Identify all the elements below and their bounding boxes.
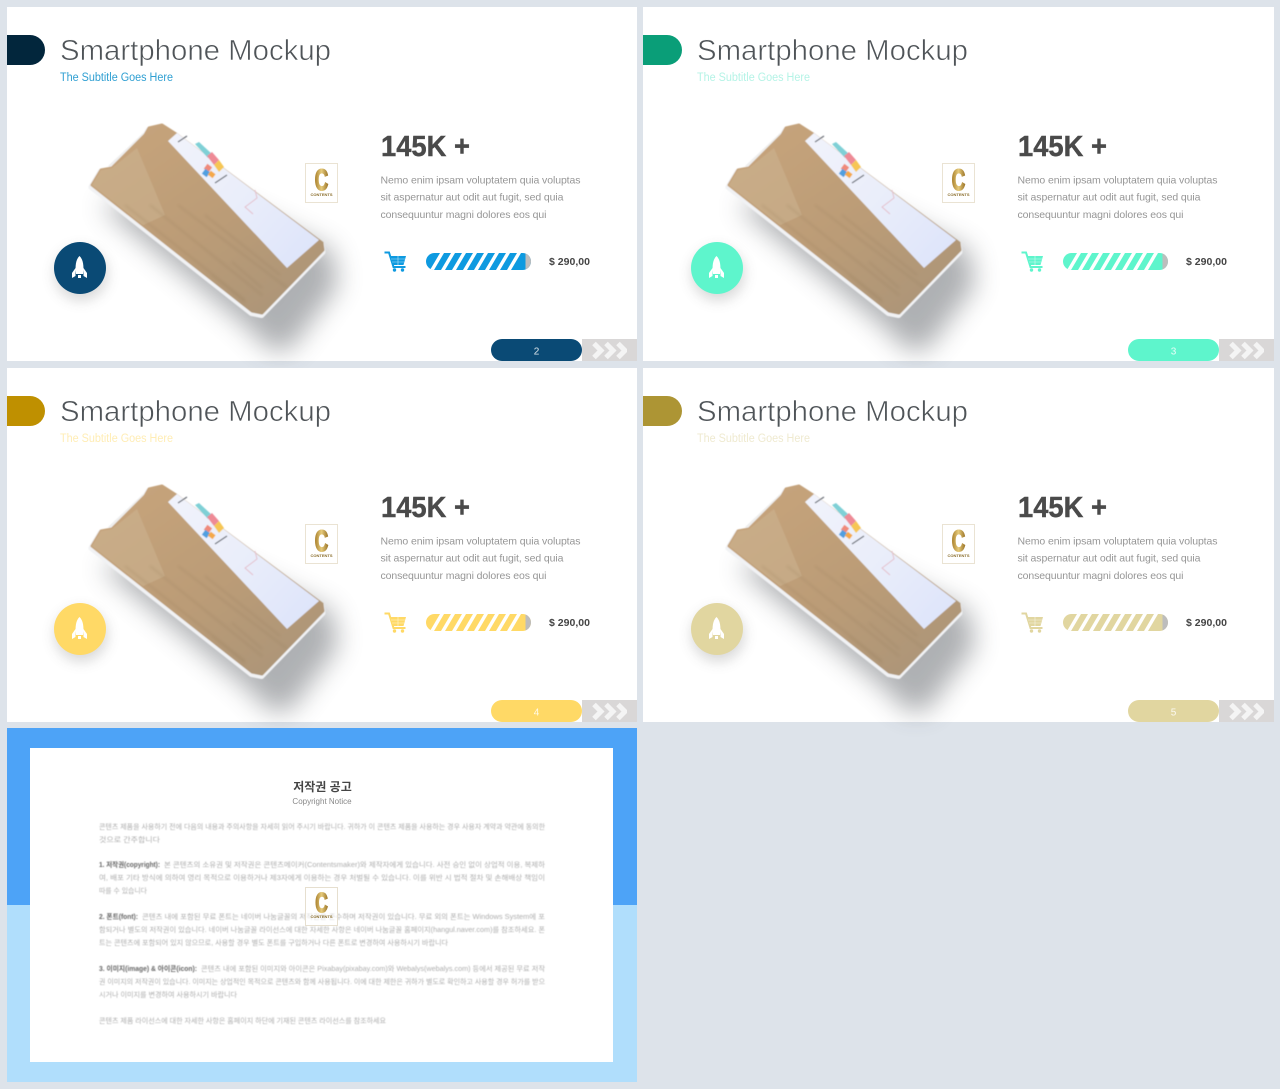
icon: rocket badge [54, 603, 107, 661]
page number: 5 [1171, 708, 1177, 718]
description [1018, 536, 1218, 582]
progress bar [426, 253, 532, 270]
panel: slide 5 khaki [643, 368, 1274, 722]
panel: slide 4 yellow [7, 368, 637, 722]
description: consequuntur magni dolores eos qui [380, 570, 546, 582]
page number: 3 [1171, 346, 1177, 358]
description: consequuntur magni dolores eos qui [1018, 570, 1184, 582]
page number: 4 [534, 708, 540, 718]
page number [1128, 339, 1274, 361]
logo: C [952, 525, 965, 558]
heading: Smartphone Mockup [697, 35, 968, 67]
progress bar [1063, 253, 1168, 270]
notice intro: 콘텐츠 제품을 사용하기 전에 다음의 내용과 주의사항을 자세히 읽어 주시기 바랍니다. 귀하가 이 콘텐츠 제품을 사용하는 경우 사용자 계약과 약관에 동의한 [99, 822, 546, 831]
title tab [643, 35, 682, 65]
logo [942, 164, 974, 202]
logo: CONTENTS [948, 192, 970, 197]
logo: C [952, 164, 965, 197]
icon: cart [1022, 252, 1043, 272]
notice section 2: 콘텐츠 내에 포함된 무료 폰트는 네이버 나눔글꼴의 저작권을 준수하며 저작권이 있습니다. 무료 외의 폰트는 Windows System에 포 [142, 912, 546, 921]
subtitle: The Subtitle Goes Here [697, 72, 810, 84]
notice section 1: 본 콘텐츠의 소유권 및 저작권은 콘텐츠메이커(Contentsmaker)와 제작자에게 있습니다. 사전 승인 없이 상업적 이용, 복제하 [164, 860, 546, 869]
panel: slide 3 green [643, 7, 1274, 361]
logo: C [315, 525, 328, 558]
heading: Smartphone Mockup [60, 35, 331, 67]
description: consequuntur magni dolores eos qui [1018, 209, 1184, 221]
notice section 1: 따를 수 있습니다 [99, 886, 148, 895]
subtitle: The Subtitle Goes Here [697, 433, 810, 445]
stat: 145K + [1018, 131, 1107, 163]
logo: CONTENTS [310, 553, 333, 558]
stat: 145K + [381, 492, 470, 524]
icon: cart [384, 614, 406, 633]
logo watermark: CONTENTS [310, 914, 333, 919]
notice section 1: 여, 배포 기타 방식에 의하여 영리 목적으로 이용하거나 제3자에게 이용하는 경우 처벌될 수 있습니다. 이를 위반 시 법적 절차 및 손해배상 책임이 [99, 873, 545, 882]
subtitle: The Subtitle Goes Here [60, 433, 173, 445]
notice section 3: 콘텐츠 내에 포함된 이미지와 아이콘은 Pixabay(pixabay.com)와 Webalys(webalys.com) 등에서 제공된 무료 저작 [201, 964, 546, 973]
icon: cart [1022, 614, 1043, 633]
description [380, 174, 580, 221]
logo: CONTENTS [310, 192, 333, 197]
description [1018, 174, 1218, 221]
logo: CONTENTS [948, 553, 970, 558]
panel: copyright notice [7, 728, 637, 1082]
icon: rocket badge [691, 603, 744, 661]
title tab [7, 35, 45, 65]
stat: 145K + [1018, 492, 1107, 524]
description: sit aspernatur aut odit aut fugit, sed quia [380, 192, 564, 204]
icon: cart [384, 252, 406, 272]
progress bar [426, 614, 532, 631]
price: $ 290,00 [549, 617, 590, 629]
price: $ 290,00 [1186, 617, 1227, 629]
notice section 3: 권 이미지의 저작권이 있습니다. 이미지는 상업적인 목적으로 콘텐츠와 함께 사용됩니다. 이에 대한 제한은 귀하가 별도로 확인하고 사용할 경우 허가를 받으 [99, 977, 546, 986]
logo [306, 164, 338, 202]
logo: C [315, 164, 328, 197]
notice section 1: 1. 저작권(copyright): [99, 860, 160, 869]
heading: Smartphone Mockup [697, 396, 968, 428]
page number [491, 339, 637, 361]
price: $ 290,00 [1186, 256, 1227, 268]
page number [491, 700, 637, 722]
notice subheading: Copyright Notice [292, 797, 352, 806]
icon: rocket badge [54, 242, 107, 300]
logo [306, 524, 338, 564]
notice section 2: 트는 콘텐츠에 포함되어 있지 않으므로, 사용할 경우 별도 폰트를 구입하거나 다른 폰트로 변경하여 사용하시기 바랍니다 [99, 938, 449, 947]
price: $ 290,00 [549, 256, 590, 268]
description: Nemo enim ipsam voluptatem quia voluptas [1018, 174, 1218, 186]
panel: slide 2 navy [7, 7, 637, 361]
logo watermark: C [315, 887, 328, 918]
description: Nemo enim ipsam voluptatem quia voluptas [380, 536, 580, 548]
notice heading: 저작권 공고 [293, 779, 352, 794]
notice section 3: 3. 이미지(image) & 아이콘(icon): [99, 964, 197, 973]
notice intro [99, 822, 546, 844]
notice section 3: 시거나 이미지를 변경하여 사용하시기 바랍니다 [99, 990, 238, 999]
notice section 2 [99, 912, 546, 947]
description [380, 536, 580, 582]
description: sit aspernatur aut odit aut fugit, sed quia [380, 552, 564, 564]
notice section 3 [99, 964, 546, 999]
page number [1128, 700, 1274, 722]
stat: 145K + [381, 131, 470, 163]
logo [942, 524, 974, 564]
description: sit aspernatur aut odit aut fugit, sed quia [1018, 552, 1201, 564]
notice section 1 [99, 860, 546, 895]
logo watermark [306, 887, 338, 926]
title tab [7, 396, 45, 426]
description: consequuntur magni dolores eos qui [380, 209, 546, 221]
progress bar [1063, 614, 1168, 631]
heading: Smartphone Mockup [60, 396, 331, 428]
title tab [643, 396, 682, 426]
icon: rocket badge [691, 242, 744, 300]
description: sit aspernatur aut odit aut fugit, sed quia [1018, 192, 1201, 204]
notice closing: 콘텐츠 제품 라이선스에 대한 자세한 사항은 홈페이지 하단에 기재된 콘텐츠 라이선스를 참조하세요 [99, 1016, 387, 1025]
phone mockup [725, 486, 975, 711]
phone mockup [88, 125, 338, 350]
phone mockup [88, 486, 338, 711]
notice intro: 것으로 간주합니다 [99, 835, 161, 844]
subtitle: The Subtitle Goes Here [60, 72, 173, 84]
description: Nemo enim ipsam voluptatem quia voluptas [1018, 536, 1218, 548]
notice section 2: 2. 폰트(font): [99, 913, 138, 921]
notice section 2: 함되거나 별도의 저작권이 있습니다. 네이버 나눔글꼴 라이선스에 대한 자세한 사항은 네이버 나눔글꼴 홈페이지(hangul.naver.com)를 참조하세요. 폰 [99, 925, 546, 934]
page number: 2 [534, 346, 540, 358]
phone mockup [725, 125, 975, 350]
description: Nemo enim ipsam voluptatem quia voluptas [380, 174, 580, 186]
